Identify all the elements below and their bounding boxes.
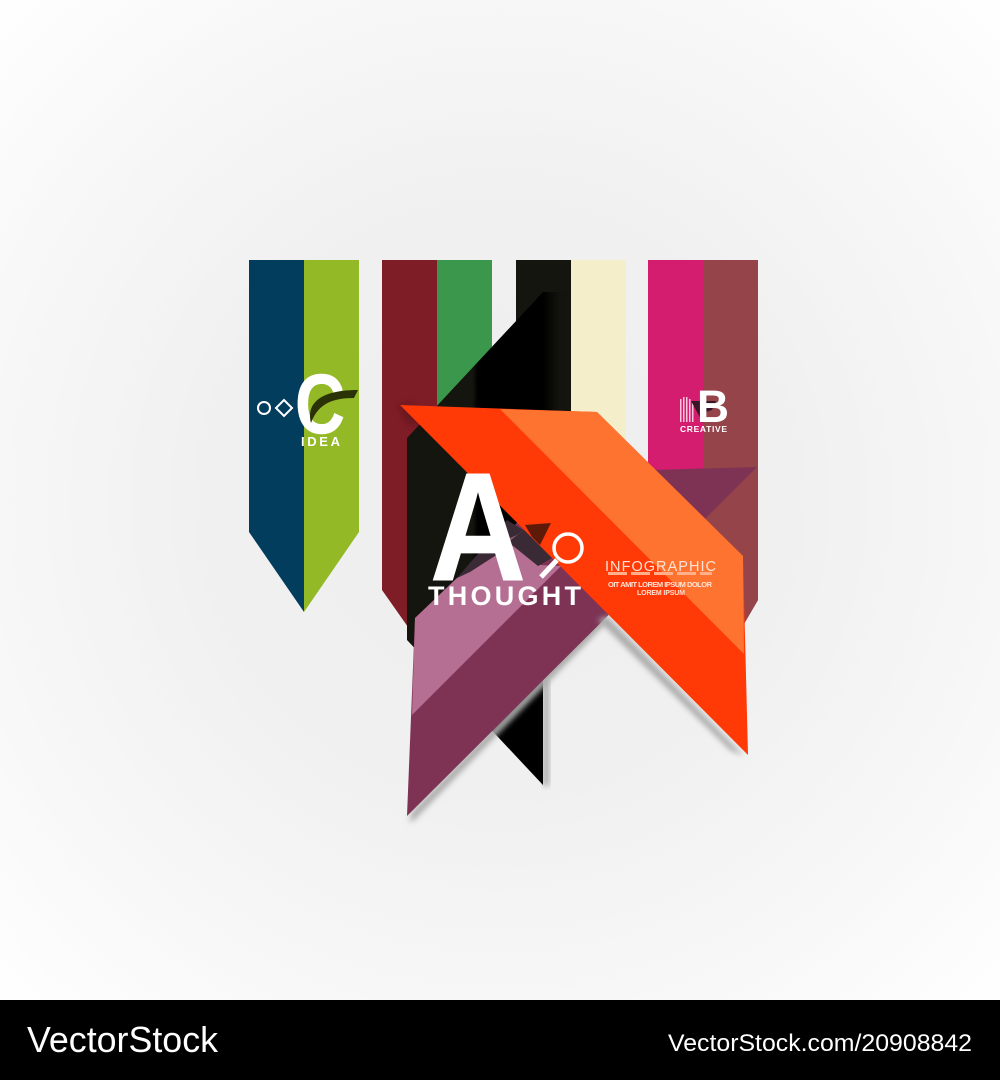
navy stripe: [249, 260, 304, 612]
brown stripe: [704, 260, 758, 624]
footer logo text: VectorStock: [27, 1019, 219, 1060]
maroon stripe: [382, 260, 437, 640]
icon: dark wedge on B: [691, 401, 716, 423]
magnifier icon: [541, 534, 582, 577]
letter B: B: [697, 381, 729, 432]
body line one: OIT AMIT LOREM IPSUM DOLOR: [608, 580, 713, 589]
body line two: LOREM IPSUM: [637, 590, 685, 597]
black stripe: [516, 260, 571, 420]
icon: circle and diamond: [258, 400, 292, 416]
black fade edge: [543, 292, 571, 420]
dashes: [608, 572, 712, 575]
black shape: [407, 292, 543, 785]
brown tail over: [704, 467, 758, 624]
dark arrow wedge: [525, 523, 551, 545]
icon: dark swoosh on C: [310, 390, 358, 423]
panel: ribbon maroon and green: [382, 260, 492, 640]
purple band: [407, 467, 757, 816]
pink stripe: [648, 260, 704, 472]
panel: orange ribbon: [398, 402, 748, 756]
red-orange band: [400, 405, 748, 755]
letter C: C: [295, 357, 345, 451]
shadow of black ribbon: [543, 680, 549, 786]
heading INFOGRAPHIC: INFOGRAPHIC: [605, 559, 716, 575]
footer url text: VectorStock.com/20908842: [668, 1030, 972, 1057]
cream stripe: [571, 260, 626, 440]
panel: purple ribbon: [407, 467, 758, 822]
icon: vertical bars: [680, 397, 694, 422]
soft top-left shadow: [398, 402, 425, 425]
panel: ribbon pink and brown: [648, 260, 758, 624]
purple ribbon shadow: [409, 616, 607, 822]
panel: ribbon black and cream: [516, 260, 626, 440]
pink band: [412, 545, 561, 715]
letter A: A: [430, 441, 526, 613]
panel: ribbon C navy and green: [249, 260, 359, 612]
footer bar: [0, 1000, 1000, 1080]
label CREATIVE: CREATIVE: [680, 424, 727, 434]
infographic text block: [605, 559, 716, 597]
pink stripe in wedge: [503, 530, 524, 543]
light orange band: [500, 409, 744, 654]
panel: central black folded ribbon: [407, 292, 571, 786]
shadow wedge behind letter A: [457, 520, 552, 578]
green stripe: [437, 260, 492, 420]
orange ribbon shadow: [598, 616, 744, 756]
label THOUGHT: THOUGHT: [428, 581, 582, 611]
green stripe: [304, 260, 359, 612]
label IDEA: IDEA: [301, 434, 341, 449]
